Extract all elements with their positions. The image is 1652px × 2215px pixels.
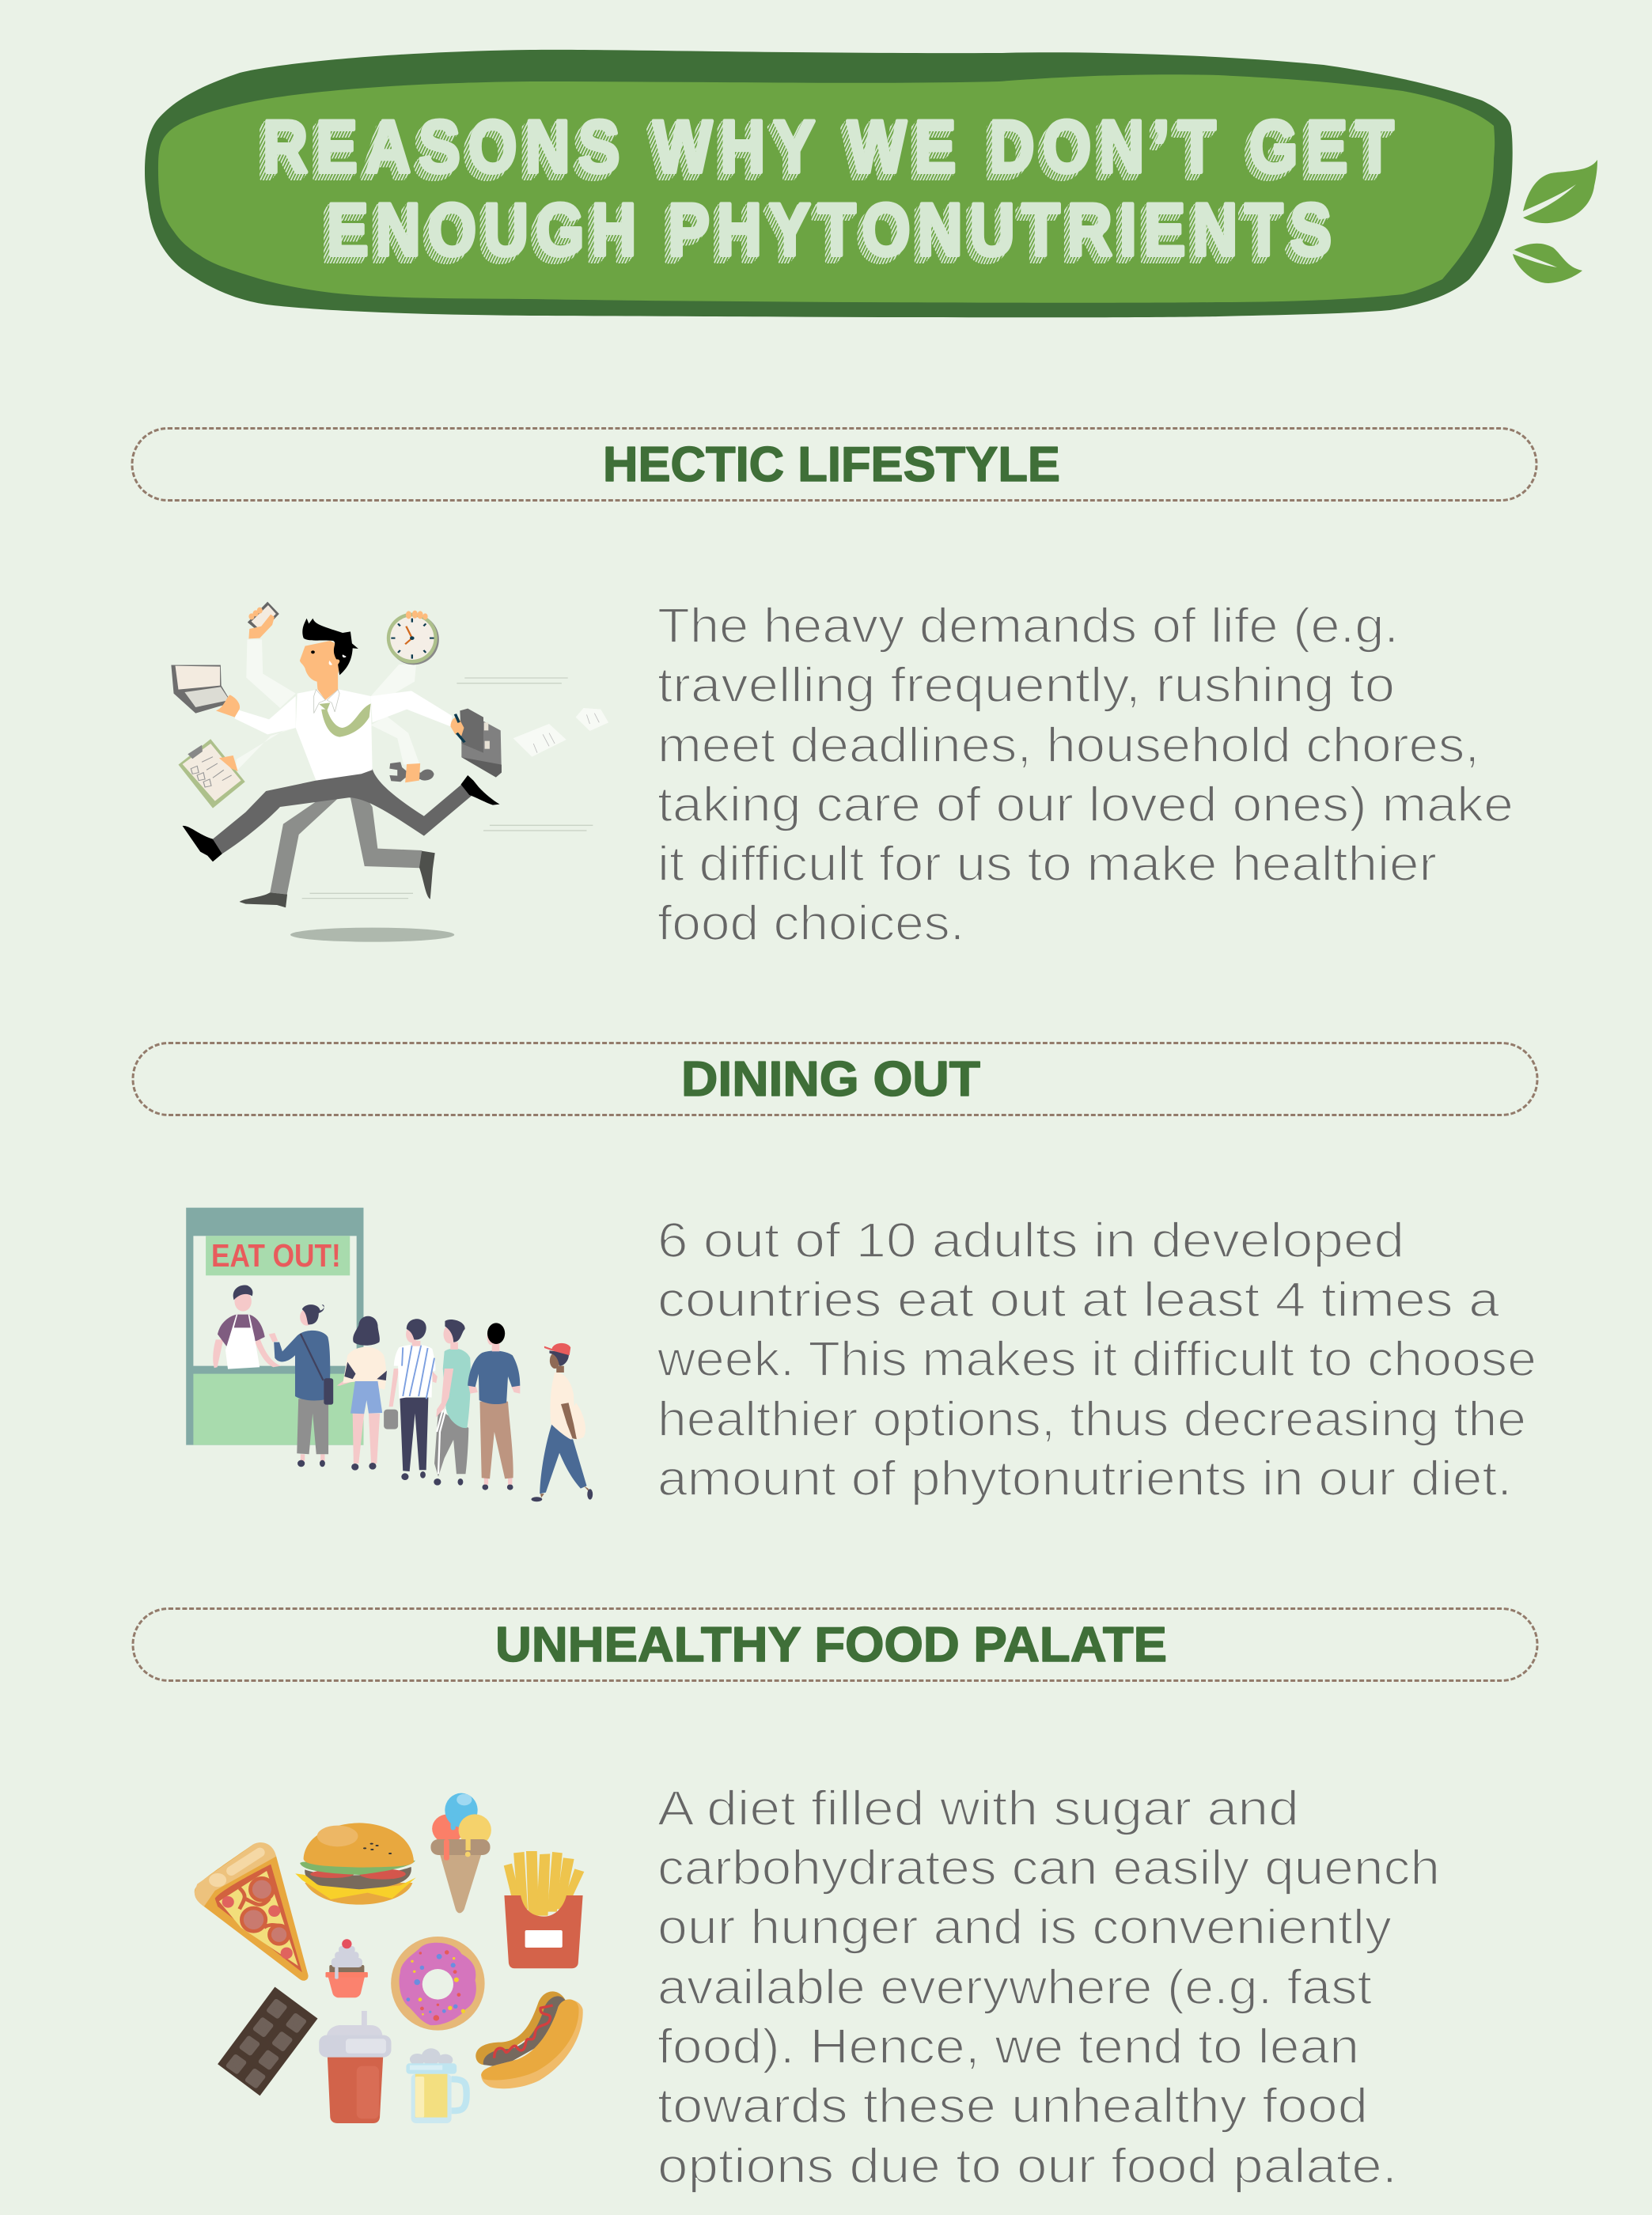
icon: pizza <box>195 1842 309 1981</box>
body text: hectic lifestyle: taking care of our loved ones) make <box>657 778 1514 832</box>
body text: hectic lifestyle: travelling frequently, rushing to <box>657 658 1395 713</box>
icon: phone <box>248 602 279 638</box>
body text: dining out <box>657 1214 1536 1506</box>
title text: REASONS WHY WE DON’T GET <box>259 109 1390 192</box>
title text: REASONS WHY WE DON’T GET <box>257 112 1389 195</box>
icon: clock <box>387 611 439 664</box>
body text: unhealthy food palate: options due to our food palate. <box>657 2139 1397 2194</box>
title text: REASONS WHY WE DON’T GET <box>263 105 1394 188</box>
body text: hectic lifestyle: food choices. <box>657 896 964 951</box>
icon: briefcase <box>450 709 502 778</box>
body text: unhealthy food palate <box>657 1781 1440 2194</box>
icon: chocolate bar <box>218 1987 317 2096</box>
body text: dining out: amount of phytonutrients in our diet. <box>657 1452 1512 1506</box>
icon: burger <box>295 1823 416 1905</box>
food stall: EAT OUT! <box>211 1238 341 1274</box>
body text: unhealthy food palate: available everywhere (e.g. fast <box>657 1960 1372 2015</box>
body text: dining out: week. This makes it difficult to choose <box>657 1332 1536 1387</box>
body text: unhealthy food palate: carbohydrates can easily quench <box>657 1841 1440 1895</box>
icon: flying papers <box>513 708 608 757</box>
section heading: unhealthy food palate <box>133 1609 1537 1680</box>
person: queue 4 <box>434 1320 471 1486</box>
body text: unhealthy food palate: our hunger and is conveniently <box>657 1900 1392 1955</box>
title text: ENOUGH PHYTONUTRIENTS <box>321 195 1326 278</box>
person: queue 2 <box>337 1316 387 1471</box>
icon: donut <box>391 1937 485 2031</box>
body text: hectic lifestyle: it difficult for us to make healthier <box>657 837 1437 892</box>
illustration: eat out queue <box>186 1208 593 1501</box>
section heading: hectic lifestyle <box>132 429 1536 500</box>
icon: fries <box>504 1851 584 1968</box>
person: queue 5 <box>468 1323 520 1490</box>
illustration: multitasking businessman <box>171 602 608 942</box>
section heading: dining out <box>133 1043 1537 1115</box>
title text: ENOUGH PHYTONUTRIENTS <box>327 188 1332 271</box>
icon: clipboard <box>178 739 245 808</box>
person: server <box>213 1285 281 1369</box>
icon: ice cream <box>430 1793 491 1913</box>
body text: dining out: healthier options, thus decreasing the <box>657 1392 1526 1447</box>
icon: leaves <box>1513 160 1597 283</box>
person: queue 6 <box>531 1343 593 1501</box>
body text: hectic lifestyle <box>657 599 1514 951</box>
icon: laptop <box>171 665 240 718</box>
title text: ENOUGH PHYTONUTRIENTS <box>323 192 1328 275</box>
body text: hectic lifestyle: meet deadlines, household chores, <box>657 718 1480 773</box>
body text: unhealthy food palate: A diet filled with sugar and <box>657 1781 1299 1836</box>
body text: dining out: 6 out of 10 adults in developed <box>657 1214 1404 1268</box>
title banner <box>145 50 1513 317</box>
icon: cupcake <box>325 1939 368 1997</box>
icon: wrench <box>389 762 434 782</box>
body text: dining out: countries eat out at least 4 times a <box>657 1273 1500 1327</box>
icon: hot dog <box>476 1991 583 2088</box>
body text: unhealthy food palate: food). Hence, we tend to lean <box>657 2020 1359 2074</box>
title text <box>257 105 1394 278</box>
food stall <box>186 1208 363 1445</box>
body text: unhealthy food palate: towards these unhealthy food <box>657 2079 1368 2134</box>
section heading: dining out: DINING OUT <box>681 1052 980 1107</box>
section heading: hectic lifestyle: HECTIC LIFESTYLE <box>603 437 1060 492</box>
section heading: unhealthy food palate: UNHEALTHY FOOD PALATE <box>495 1618 1167 1672</box>
illustration: junk food collection <box>195 1793 584 2123</box>
title text: ENOUGH PHYTONUTRIENTS <box>325 191 1330 274</box>
person: queue 1 <box>269 1304 333 1467</box>
title text: REASONS WHY WE DON’T GET <box>261 108 1392 191</box>
person: queue 3 <box>384 1319 438 1480</box>
body text: hectic lifestyle: The heavy demands of life (e.g. <box>657 599 1399 653</box>
icon: beer mug <box>406 2048 467 2123</box>
icon: soda cup <box>319 2011 391 2123</box>
